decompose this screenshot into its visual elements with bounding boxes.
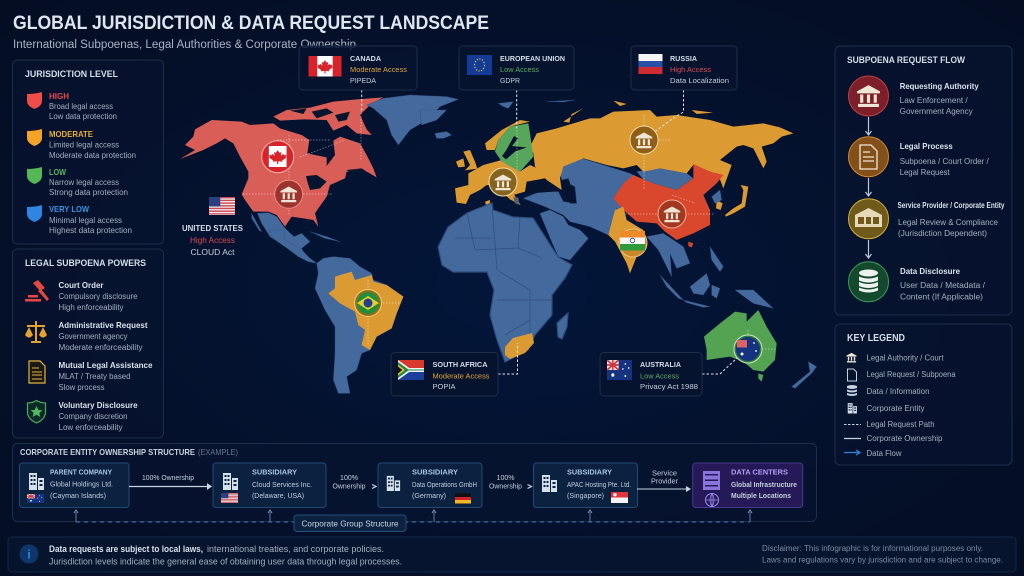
connector: callouts to countries	[362, 90, 737, 374]
level: moderate	[27, 129, 136, 160]
callout: United States: CLOUD Act	[190, 248, 235, 257]
callout: Russia: Data Localization	[670, 76, 729, 85]
flow arrows	[866, 117, 872, 258]
step: legal process: Legal Request	[900, 168, 950, 177]
Middle East and Central Asia	[420, 110, 640, 260]
step: data disclosure: Data Disclosure	[900, 266, 960, 276]
label: corporate group structure	[294, 515, 406, 532]
arrow: 100% ownership: 100% Ownership	[142, 475, 194, 482]
entity: subsidiary Delaware: (Delaware, USA)	[252, 493, 304, 500]
entity: subsidiary Germany: (Germany)	[412, 493, 446, 500]
power: court order	[25, 280, 138, 312]
panel: jurisdiction level	[12, 60, 164, 244]
level: very low	[27, 204, 132, 235]
marker: United States	[275, 180, 303, 208]
Africa	[438, 203, 572, 362]
level: high	[27, 91, 117, 121]
callout: European Union: GDPR	[500, 76, 521, 85]
callout: Canada: CANADA	[350, 54, 382, 63]
entity: subsidiary Singapore: APAC Hosting Pte. Ltd.	[567, 482, 631, 489]
Europe and India	[455, 120, 647, 273]
legend: data: Data / Information	[866, 387, 930, 396]
panel: subpoena request flow	[835, 46, 1012, 315]
legend: data	[847, 385, 930, 396]
Russia, China and East Asia	[498, 100, 793, 247]
step: legal process: Legal Process	[900, 141, 953, 151]
Greenland and Mexico	[252, 95, 458, 260]
legend: corporate entity: Corporate Entity	[866, 404, 924, 413]
entity: subsidiary Singapore	[534, 463, 638, 508]
step: requesting authority: Government Agency	[900, 107, 973, 116]
arrow: ownership to Germany	[332, 475, 376, 490]
power: court order: Compulsory disclosure	[58, 292, 138, 301]
legend: legal request	[848, 369, 956, 381]
entity: parent company: (Cayman Islands)	[50, 493, 106, 500]
power: voluntary disclosure: Company discretion	[58, 412, 128, 421]
legend: legal authority: Legal Authority / Court	[866, 354, 944, 362]
icon: info: i	[27, 548, 31, 562]
step: requesting authority: Law Enforcement /	[900, 96, 968, 105]
arrow: 100% ownership	[129, 475, 212, 490]
level: very low: VERY LOW	[49, 204, 90, 214]
panel: corporate entity ownership structure	[12, 444, 816, 532]
step: data disclosure: User Data / Metadata /	[900, 281, 986, 290]
marker: Brazil	[354, 290, 382, 316]
level: low: Strong data protection	[49, 188, 128, 197]
marker: Canada	[259, 141, 297, 173]
power: mutual legal assistance: MLAT / Treaty based	[58, 372, 130, 381]
group structure dashed line	[74, 510, 752, 522]
callout: United States: High Access	[190, 236, 235, 245]
callout: South Africa: Moderate Access	[432, 372, 490, 380]
entity: subsidiary Germany: SUBSIDIARY	[412, 468, 458, 477]
entity: subsidiary Germany	[378, 463, 482, 508]
panel: legal subpoena powers	[12, 249, 164, 438]
level: high: Low data protection	[49, 112, 117, 121]
callout: United States	[182, 197, 244, 257]
panel: jurisdiction level: JURISDICTION LEVEL	[25, 69, 118, 80]
step: data disclosure	[848, 262, 986, 302]
note text	[49, 544, 402, 568]
legend: corporate ownership: Corporate Ownership	[866, 434, 943, 443]
level: very low: Minimal legal access	[49, 216, 122, 225]
marker: Australia	[734, 335, 762, 363]
power: voluntary disclosure: Low enforceability	[58, 423, 122, 432]
marker: China	[658, 200, 686, 228]
arrow: ownership to Singapore: Ownership	[489, 484, 522, 490]
level: very low: Highest data protection	[49, 226, 132, 235]
marker: European Union	[489, 168, 517, 196]
arrow: service provider: Provider	[651, 478, 679, 486]
level: low: LOW	[49, 167, 67, 177]
power: administrative request: Moderate enforceability	[58, 343, 142, 352]
panel: key legend: KEY LEGEND	[847, 332, 905, 344]
callout: Russia: RUSSIA	[670, 54, 698, 63]
disclaimer	[762, 544, 1003, 564]
power: mutual legal assistance	[29, 360, 153, 392]
entity: subsidiary Delaware: SUBSIDIARY	[252, 468, 297, 477]
South America and Brazil	[268, 230, 403, 393]
entity: parent company: Global Holdings Ltd.	[50, 482, 113, 488]
panel: legal subpoena powers: LEGAL SUBPOENA POWERS	[25, 258, 146, 269]
title: GLOBAL JURISDICTION & DATA REQUEST LANDSCAPE	[13, 12, 489, 34]
North America, Canada and United States	[180, 97, 383, 227]
callout: European Union: Low Access	[500, 65, 539, 74]
note text: Jurisdiction levels indicate the general ease of obtaining user data through legal processes.	[49, 556, 402, 568]
arrow: service provider: Service	[652, 470, 677, 478]
entity: data centers: Global Infrastructure	[731, 482, 797, 489]
callout: Australia: Privacy Act 1988	[640, 382, 698, 391]
legend: legal request path: Legal Request Path	[866, 420, 934, 429]
step: legal process	[848, 137, 989, 177]
internal route lines on map	[243, 110, 775, 349]
level: high: HIGH	[49, 91, 69, 101]
Southeast Asia, Oceania	[647, 233, 817, 388]
callout: Canada: Moderate Access	[350, 65, 407, 74]
power: court order: Court Order	[58, 280, 104, 290]
power: mutual legal assistance: Slow process	[58, 383, 104, 392]
step: service provider	[848, 199, 1005, 239]
footer note	[8, 537, 1016, 572]
callout: South Africa: POPIA	[432, 382, 456, 391]
legend: data flow: Data Flow	[866, 449, 902, 458]
label: corporate group structure: Corporate Group Structure	[302, 518, 399, 528]
entity: data centers	[693, 463, 803, 508]
level: moderate: MODERATE	[49, 129, 93, 139]
panel: corporate entity ownership structure: CORPORATE ENTITY OWNERSHIP STRUCTURE	[20, 447, 195, 457]
entity: subsidiary Singapore: SUBSIDIARY	[567, 468, 612, 477]
level: high: Broad legal access	[49, 102, 113, 111]
arrow: ownership to Singapore	[489, 475, 532, 490]
callout: South Africa: SOUTH AFRICA	[432, 360, 488, 369]
power: voluntary disclosure	[28, 400, 138, 432]
callout: Australia	[600, 352, 702, 396]
legend: data flow	[844, 449, 902, 458]
arrow: ownership to Singapore: 100%	[497, 475, 514, 482]
legend: legal request: Legal Request / Subpoena	[866, 370, 956, 379]
callout: Canada	[299, 46, 417, 90]
power: administrative request: Government agency	[58, 332, 128, 341]
power: administrative request	[25, 320, 148, 352]
level: low: Narrow legal access	[49, 178, 119, 187]
entity: data centers: DATA CENTERS	[731, 468, 788, 477]
step: requesting authority	[848, 76, 979, 116]
callout: European Union: EUROPEAN UNION	[500, 54, 565, 63]
callout: Russia: High Access	[670, 65, 711, 74]
note text: Data requests are subject to local laws,	[49, 544, 203, 555]
icon: info	[20, 544, 38, 564]
entity: parent company	[20, 463, 129, 508]
entity: parent company: PARENT COMPANY	[50, 468, 112, 477]
entity: data centers: Multiple Locations	[731, 493, 791, 500]
callout: South Africa	[391, 352, 498, 396]
legend: corporate entity	[848, 403, 924, 414]
callout: Australia: Low Access	[640, 372, 679, 380]
power: mutual legal assistance: Mutual Legal Assistance	[58, 360, 153, 370]
world map	[180, 95, 817, 393]
step: service provider: Legal Review & Compliance	[898, 218, 999, 227]
panel: key legend	[835, 324, 1012, 465]
entity: subsidiary Delaware: Cloud Services Inc.	[252, 482, 312, 489]
marker: Russia	[630, 126, 658, 154]
arrow: service provider	[637, 470, 691, 492]
step: legal process: Subpoena / Court Order /	[900, 157, 989, 166]
entity: subsidiary Germany: Data Operations GmbH	[412, 482, 477, 489]
note text: international treaties, and corporate policies.	[207, 544, 384, 555]
entity: subsidiary Singapore: (Singapore)	[567, 493, 604, 500]
subtitle: International Subpoenas, Legal Authorities & Corporate Ownership	[13, 39, 356, 51]
level: low	[27, 167, 128, 197]
callout: Canada: PIPEDA	[350, 76, 376, 85]
entity: subsidiary Delaware	[213, 463, 326, 508]
arrow: ownership to Germany: 100%	[340, 475, 358, 482]
disclaimer: Disclaimer: This infographic is for informational purposes only.	[762, 544, 983, 553]
callout: United States: UNITED STATES	[182, 224, 244, 233]
power: voluntary disclosure: Voluntary Disclosure	[58, 400, 138, 410]
arrow: ownership to Germany: Ownership	[332, 484, 366, 490]
step: service provider: (Jurisdiction Dependent)	[898, 229, 987, 238]
panel: subpoena request flow: SUBPOENA REQUEST FLOW	[847, 55, 965, 66]
panel: corporate entity ownership structure: (EXAMPLE)	[198, 448, 238, 457]
marker: India	[619, 229, 647, 257]
callout: Australia: AUSTRALIA	[640, 360, 682, 369]
disclaimer: Laws and regulations vary by jurisdiction and are subject to change.	[762, 556, 1003, 564]
level: moderate: Limited legal access	[49, 140, 119, 150]
step: requesting authority: Requesting Authority	[900, 81, 979, 91]
level: moderate: Moderate data protection	[49, 151, 136, 160]
power: court order: High enforceability	[58, 303, 124, 312]
power: administrative request: Administrative Request	[58, 320, 148, 330]
callout: European Union	[459, 46, 574, 90]
step: data disclosure: Content (If Applicable)	[900, 292, 983, 302]
callout: Russia	[631, 46, 737, 90]
